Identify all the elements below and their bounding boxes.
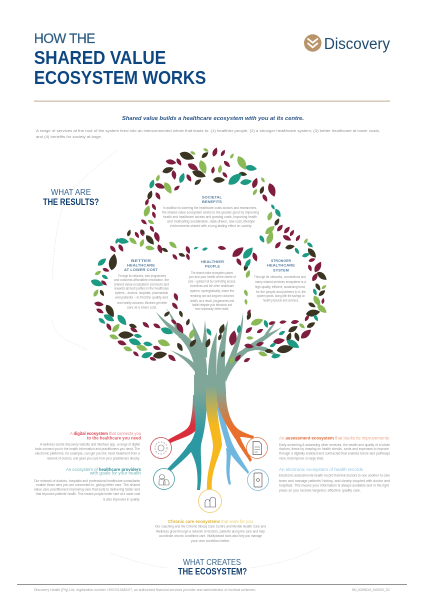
panel: stronger healthcare system: Through its networks, connections and: [254, 275, 306, 279]
text block: digital ecosystem: A digital ecosystem that connects you: [70, 431, 142, 436]
footer: [34, 588, 391, 592]
label: what are the results: WHAT ARE: [51, 187, 91, 197]
text block: electronic ecosystem: hospitals. This means your information is always available and in the right: [279, 484, 389, 488]
panel: healthier people: more importantly, better health.: [195, 307, 229, 311]
leaves: dark brown: [99, 150, 328, 360]
panel: societal benefits: BENEFITS: [202, 199, 222, 204]
text block: healthcare providers: [34, 467, 142, 501]
text block: healthcare providers: Our network of doctors, hospitals and professional healthcare consultants: [34, 479, 140, 483]
panel: healthier people: care – guided not by controlling access.: [188, 279, 236, 283]
panel: stronger healthcare system: for the people and partners in it, the: [256, 290, 306, 294]
text block: healthcare providers: An ecosystem of healthcare providers: [66, 467, 142, 472]
text block: electronic ecosystem: [279, 467, 390, 493]
text block: healthcare providers: with goals for your health: [90, 471, 142, 476]
text block: chronic care: Our coaching and the Chronic Illness Care Centre and Mental Health Care and: [155, 525, 266, 529]
text block: assessment ecosystem: Early screening & assessing other services, the health and quality of a whole: [279, 443, 390, 447]
panel: stronger healthcare system: high-quality, efficient, sustaining force,: [255, 285, 306, 289]
text block: healthcare providers: is also improved in quality.: [103, 497, 140, 501]
panel: stronger healthcare system: many shared services ecosystem is a: [255, 280, 307, 284]
icon: electronic ecosystem: [248, 470, 268, 490]
panel: healthier people: PEOPLE: [205, 264, 220, 268]
panel: healthier people: habits integrate your behaviour and: [192, 303, 232, 307]
logo: Discovery: [304, 34, 390, 53]
text block: chronic care: Wellness grow through a network of doctors, patients along the care and help: [156, 530, 265, 534]
panel: healthier people: you and your health at the centre of: [189, 275, 237, 279]
panel: societal benefits: In addition to lowering the healthcare costs doctors and researchers,: [163, 206, 257, 210]
text block: digital ecosystem: network of doctors, and gives you care from your practitioners directly.: [47, 456, 140, 460]
panel: better healthcare at lower cost: AT LOWER COST: [124, 267, 158, 272]
text block: healthcare providers: that improves patients' health. This means people better care at a lower cost: [36, 492, 140, 496]
icon: chronic care: [198, 490, 222, 512]
text block: digital ecosystem: tools connect you to the health information and practitioners you need. The: [35, 447, 140, 451]
panel: stronger healthcare system: health products and services.: [263, 298, 299, 302]
title: [34, 31, 206, 88]
text block: digital ecosystem: electronic platforms, for example, can get you the most treatment from a: [35, 452, 141, 456]
root: red: [165, 395, 197, 445]
panel: better healthcare at lower cost: [114, 258, 169, 310]
panel: better healthcare at lower cost: HEALTHCARE: [127, 262, 155, 268]
title: ECOSYSTEM WORKS: [34, 68, 206, 88]
logo: Discovery: Discovery: [324, 36, 390, 53]
leaves canopy: [90, 147, 328, 365]
icon: assessment ecosystem: [246, 438, 268, 458]
intro text: A range of services at the root of the system feed into an interconnected whole that leads to: (1) healthier people, (2) a stronger healthcare system, (3) better healthcare at lower costs,: [36, 129, 380, 133]
footer: BM_80396DM_26/08/19_DC: [352, 588, 391, 592]
text block: chronic care: your own condition better.: [191, 539, 230, 543]
panel: better healthcare at lower cost: rewards all best parties in the healthcare: [114, 286, 169, 290]
branches: [156, 308, 282, 382]
text block: digital ecosystem: A wellness-centre discovery website and interface app, a range of digital: [40, 442, 140, 446]
text block: digital ecosystem: [35, 431, 142, 460]
panel: stronger healthcare system: system grows, along with the savings on: [257, 294, 305, 298]
text block: chronic care: Chronic care ecosystems that work for you: [168, 519, 254, 524]
panel: societal benefits: SOCIETAL: [202, 194, 222, 200]
footer: Discovery Health (Pty) Ltd; registration number 1997/013480/07, an authorised financial services provider and administrator of medical schemes.: [34, 588, 256, 592]
text block: assessment ecosystem: more, that improve on large trials.: [279, 456, 324, 460]
label: what creates the ecosystem: THE ECOSYSTEM?: [178, 566, 247, 578]
label: what creates the ecosystem: WHAT CREATES: [183, 557, 241, 567]
panel: healthier people: remaining care and long-term outcomes: [190, 294, 234, 298]
panel: better healthcare at lower cost: and patients – to find the quality and: [115, 296, 168, 300]
panel: healthier people: The shared value ecosystem places: [191, 271, 233, 275]
text block: assessment ecosystem: through a digitally enabled and contracted that enables future and pathways: [279, 452, 390, 456]
text block: electronic ecosystem: place so you receive targeted, effective quality care.: [279, 489, 361, 493]
text block: electronic ecosystem: An electronic ecosystem of health records: [279, 467, 363, 472]
panel: societal benefits: [162, 194, 259, 228]
tree: trunk and roots: [156, 308, 282, 492]
root: orange: [216, 375, 254, 462]
leaves: light green: [92, 147, 328, 365]
text block: chronic care: coordinate chronic conditions care. Vitalitybased tools also help you manage: [159, 534, 262, 538]
text block: electronic ecosystem: team and manage patients' history, and clearly coupled with doctor and: [279, 479, 390, 483]
panel: better healthcare at lower cost: most healthy outcomes. Members get better: [117, 301, 168, 305]
panel: stronger healthcare system: SYSTEM: [273, 268, 290, 272]
label: what creates the ecosystem: [178, 557, 247, 578]
panel: healthier people: system, synergistically, share the: [190, 289, 234, 293]
panel: societal benefits: the shared value ecosystem works to the greater good by improving: [162, 211, 259, 215]
text block: healthcare providers: enable those who you are connected to, giving better care. The shared: [36, 483, 140, 487]
panel: better healthcare at lower cost: care at a lower cost.: [127, 306, 157, 310]
panel: healthier people: Incentives and the other healthcare: [190, 284, 234, 288]
icon: healthcare providers: [154, 468, 174, 490]
title: HOW THE: [34, 31, 97, 46]
intro text: [36, 129, 380, 139]
intro text: and (4) benefits for society at large.: [36, 135, 102, 139]
root: blue: [217, 405, 249, 474]
leaves: teal: [90, 164, 319, 360]
text block: assessment ecosystem: doctors, these by drawing on health checks, costs and expenses to improve: [279, 447, 389, 451]
label: what are the results: THE RESULTS?: [43, 197, 99, 208]
dashed outline arcs: [52, 150, 320, 568]
root: teal: [163, 375, 207, 490]
panel: societal benefits: and motivating sustainable, data-driven, low-cost, lifestyle: [167, 220, 255, 224]
panel: healthier people: [188, 259, 237, 311]
text block: electronic ecosystem: Electronic assessments health record that link doctors to one another to care: [279, 474, 390, 478]
text block: chronic care: [155, 519, 266, 543]
panel: stronger healthcare system: STRONGER: [271, 258, 291, 263]
icon: digital ecosystem: [150, 438, 172, 458]
text block: digital ecosystem: to the healthcare you need: [87, 436, 141, 440]
panel: societal benefits: environments shared with a long-lasting effect on society.: [170, 224, 252, 228]
root: yellow: [206, 375, 222, 492]
text block: assessment ecosystem: [279, 436, 390, 460]
leaves: maroon: [94, 147, 325, 363]
panel: better healthcare at lower cost: shared value ecosystem connects and: [114, 282, 169, 286]
panel: healthier people: health, as a result, programmes and: [190, 299, 234, 303]
panel: better healthcare at lower cost: BETTER: [131, 258, 151, 263]
text block: assessment ecosystem: An assessment ecosystem that tracks its improvements: [279, 436, 389, 440]
label: what are the results: [43, 187, 99, 208]
panel: societal benefits: health and healthcare access and growing costs, improving health: [163, 215, 257, 219]
panel: stronger healthcare system: [254, 258, 307, 302]
panel: better healthcare at lower cost: and outcome-affordable innovation, the: [114, 278, 169, 282]
panel: better healthcare at lower cost: Through its networks, care programmes: [118, 274, 166, 278]
subtitle: Shared value builds a healthcare ecosystem with you at its centre.: [122, 116, 304, 122]
panel: better healthcare at lower cost: system – doctors, hospitals, pharmacists: [115, 291, 168, 295]
panel: healthier people: HEALTHIER: [201, 259, 224, 264]
text block: healthcare providers: value care practitioners improving care that suits to delivering faster and: [34, 487, 140, 491]
panel: stronger healthcare system: HEALTHCARE: [267, 262, 295, 268]
title: SHARED VALUE: [34, 48, 166, 68]
